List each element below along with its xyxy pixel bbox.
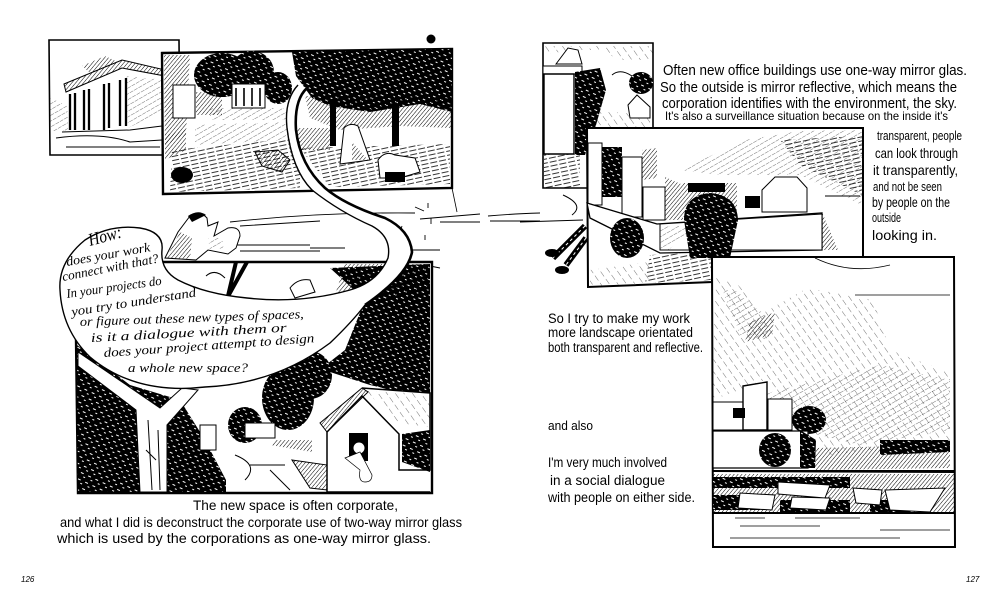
text: transparency column: by people on the (872, 194, 950, 210)
bubble text: does your work (65, 239, 151, 269)
icon: black dot (426, 34, 436, 44)
caption: left page (56, 497, 462, 546)
scattered horizon strokes (222, 203, 540, 268)
text: one-way mirror glass: Often new office buildings use one-way mirror glas. (663, 62, 967, 79)
bubble text (61, 222, 315, 375)
text: one-way mirror glass: corporation identifies with the environment, the sky. (662, 95, 957, 112)
speech bubble with tail (60, 85, 412, 388)
caption: left page: and what I did is deconstruct the corporate use of two-way mirror glass (60, 514, 462, 530)
panel: figure on terrace (543, 43, 653, 188)
text: social dialogue: with people on either side. (547, 490, 695, 505)
panel: classical building (49, 40, 180, 155)
text: social dialogue: I'm very much involved (548, 455, 667, 470)
bubble text: In your projects do (64, 273, 163, 301)
text: one-way mirror glass: It's also a surveillance situation because on the inside it's (665, 109, 948, 123)
text: landscape orientated: more landscape orientated (548, 325, 693, 340)
text: landscape orientated: both transparent and reflective. (548, 340, 703, 355)
icon: mother and baby figures (165, 212, 240, 260)
text: transparency column (872, 128, 962, 243)
text: transparency column: can look through (875, 145, 958, 161)
page number: 127: 127 (966, 575, 980, 584)
caption: left page: which is used by the corporations as one-way mirror glass. (56, 530, 431, 546)
text: one-way mirror glass: So the outside is mirror reflective, which means the (660, 79, 957, 96)
bubble text: does your project attempt to design (103, 330, 315, 360)
text: social dialogue: in a social dialogue (550, 473, 665, 488)
panel: park scene with children (162, 49, 457, 212)
text: transparency column: and not be seen (873, 179, 942, 194)
bubble text: is it a dialogue with them or (90, 320, 288, 345)
text: social dialogue (547, 455, 695, 505)
panel: landscape with town and cows (712, 257, 955, 547)
bubble text: connect with that? (61, 250, 160, 284)
caption: left page: The new space is often corporate, (193, 497, 398, 513)
bubble text: a whole new space? (128, 360, 249, 375)
icon: figure's legs (520, 195, 586, 274)
text: transparency column: looking in. (872, 227, 937, 243)
bubble text: or figure out these new types of spaces, (80, 306, 304, 329)
bubble text: How: (85, 222, 124, 250)
panel: hill town with towers (587, 128, 863, 287)
bubble text: you try to understand (68, 284, 197, 319)
text: one-way mirror glass (660, 62, 967, 123)
text: landscape orientated (548, 311, 703, 355)
text: transparency column: transparent, people (877, 128, 962, 143)
text: transparency column: outside (872, 210, 901, 225)
text: transparency column: it transparently, (873, 162, 958, 178)
text: landscape orientated: So I try to make my work (548, 311, 690, 326)
panel: garden with house (75, 262, 432, 493)
page number: 126: 126 (21, 575, 35, 584)
text: and also: and also (548, 418, 593, 433)
